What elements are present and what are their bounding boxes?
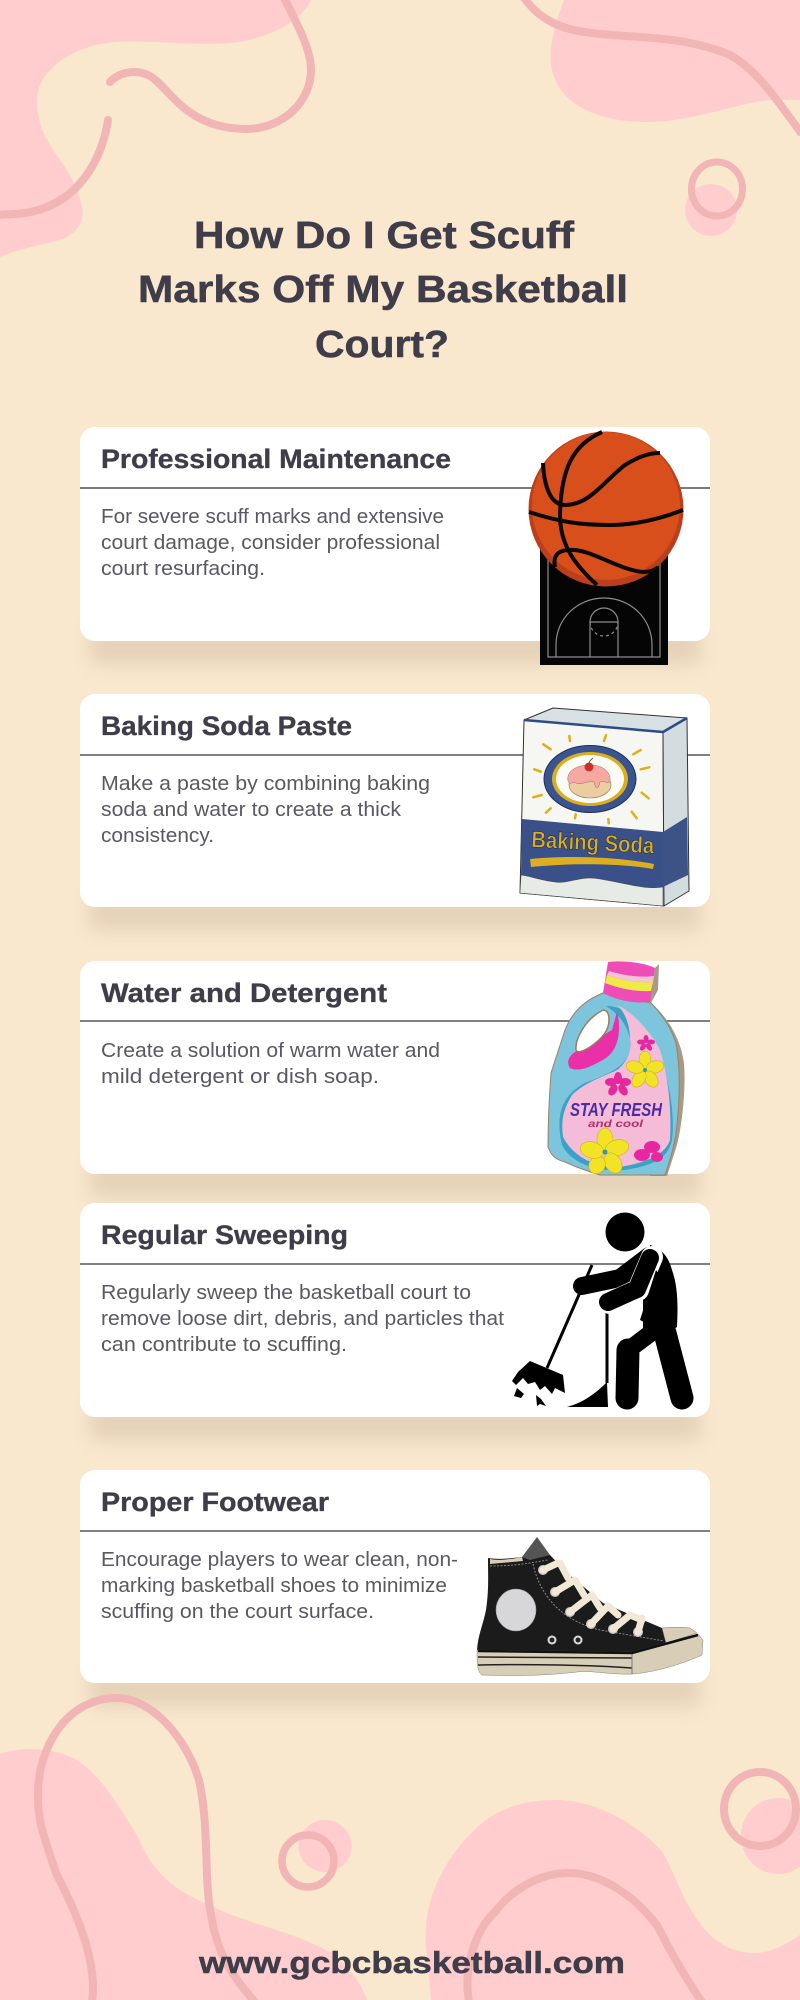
text: baking soda paste: consistency. — [101, 825, 214, 847]
text: proper footwear — [101, 1549, 458, 1623]
panel: water and detergent — [80, 961, 710, 1197]
text: regular sweeping — [101, 1282, 504, 1356]
icon: person sweeping — [512, 1212, 682, 1407]
website url: www.gcbcbasketball.com — [198, 1945, 625, 1980]
heading: regular sweeping: Regular Sweeping — [101, 1220, 348, 1250]
bottom right blob — [425, 1800, 800, 2000]
text on bottle: STAY FRESH — [570, 1100, 663, 1120]
text: water and detergent — [101, 1040, 440, 1088]
text: professional maintenance: court resurfacing. — [101, 558, 265, 580]
text: proper footwear: scuffing on the court surface. — [101, 1601, 374, 1623]
text: regular sweeping: remove loose dirt, debris, and particles that — [101, 1308, 504, 1330]
text: baking soda paste: soda and water to create a thick — [101, 799, 402, 821]
text: professional maintenance: For severe scuff marks and extensive — [101, 506, 444, 528]
text: regular sweeping: Regularly sweep the basketball court to — [101, 1282, 471, 1304]
panel: professional maintenance — [80, 427, 710, 665]
bottom left curved line — [38, 1698, 255, 2000]
text: water and detergent: mild detergent or dish soap. — [101, 1066, 379, 1088]
icon: detergent bottle — [548, 961, 685, 1177]
text: proper footwear: Encourage players to wear clean, non- — [101, 1549, 458, 1571]
text: professional maintenance: court damage, consider professional — [101, 532, 440, 554]
title: Marks Off My Basketball — [138, 269, 628, 311]
bottom right circle decoration — [724, 1772, 800, 1874]
icon: baking soda box: Baking Soda — [531, 826, 655, 858]
text: professional maintenance — [101, 506, 444, 580]
top right blob — [551, 0, 800, 122]
icon: basketball and court — [528, 432, 684, 665]
text on bottle: and cool — [588, 1119, 643, 1130]
text: proper footwear: marking basketball shoes to minimize — [101, 1575, 447, 1597]
title: How Do I Get Scuff — [194, 215, 574, 257]
panel: baking soda paste — [80, 694, 710, 930]
title: Court? — [315, 324, 449, 366]
top left blob — [0, 0, 311, 257]
bottom left blob — [0, 1749, 367, 2000]
text: regular sweeping: can contribute to scuffing. — [101, 1334, 347, 1356]
top right circle decoration — [685, 162, 742, 236]
heading: professional maintenance: Professional Maintenance — [101, 444, 451, 474]
icon: baking soda box — [520, 708, 689, 906]
heading: water and detergent: Water and Detergent — [101, 978, 387, 1008]
text on bottle — [570, 1100, 663, 1130]
text: baking soda paste: Make a paste by combining baking — [101, 773, 430, 795]
top right curved line — [523, 0, 800, 134]
icon: high-top sneaker — [477, 1537, 703, 1676]
panel: proper footwear — [80, 1470, 710, 1706]
top left curved lines — [0, 0, 311, 215]
heading: proper footwear: Proper Footwear — [101, 1487, 330, 1517]
text: water and detergent: Create a solution of warm water and — [101, 1040, 440, 1062]
panel: regular sweeping — [80, 1203, 710, 1440]
bottom right curved line — [467, 1873, 702, 2000]
heading: baking soda paste: Baking Soda Paste — [101, 711, 352, 741]
bottom centre circle decoration — [282, 1820, 352, 1887]
title — [138, 215, 628, 366]
text: baking soda paste — [101, 773, 430, 847]
flowers on bottle — [578, 1035, 665, 1177]
